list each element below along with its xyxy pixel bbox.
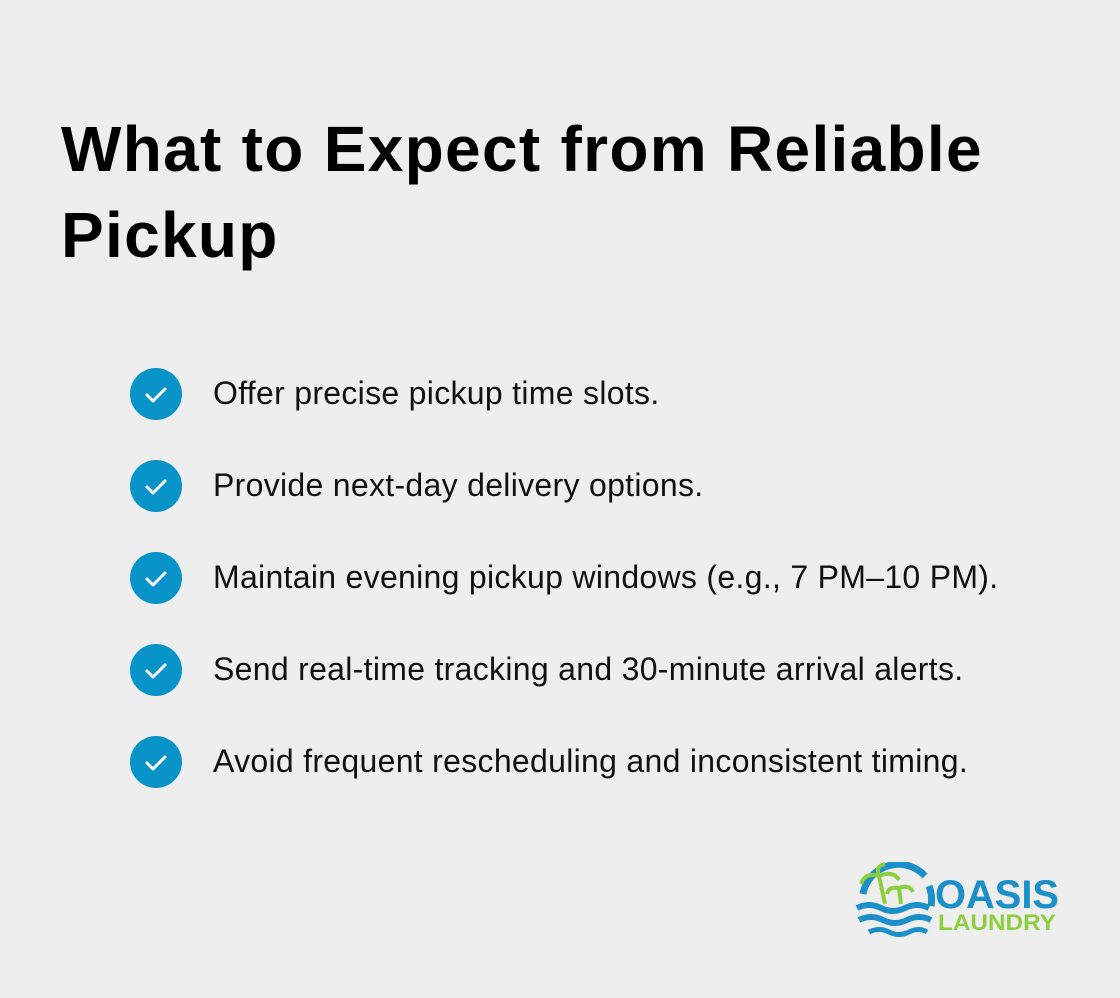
title [61,113,983,271]
logo [856,862,1059,937]
item 5 [130,736,968,788]
logo: LAUNDRY [938,910,1056,935]
item 1: Offer precise pickup time slots. [213,375,660,411]
item 5: Avoid frequent rescheduling and inconsistent timing. [213,743,968,779]
item 3: Maintain evening pickup windows (e.g., 7 PM–10 PM). [213,559,998,595]
logo: OASIS [935,873,1059,917]
title: What to Expect from Reliable [61,113,983,185]
item 2: Provide next-day delivery options. [213,467,703,503]
item 2 [130,460,703,512]
item 4 [130,644,963,696]
item 4: Send real-time tracking and 30-minute arrival alerts. [213,651,963,687]
item 3 [130,552,998,604]
item 1 [130,368,660,420]
title: Pickup [61,199,279,271]
